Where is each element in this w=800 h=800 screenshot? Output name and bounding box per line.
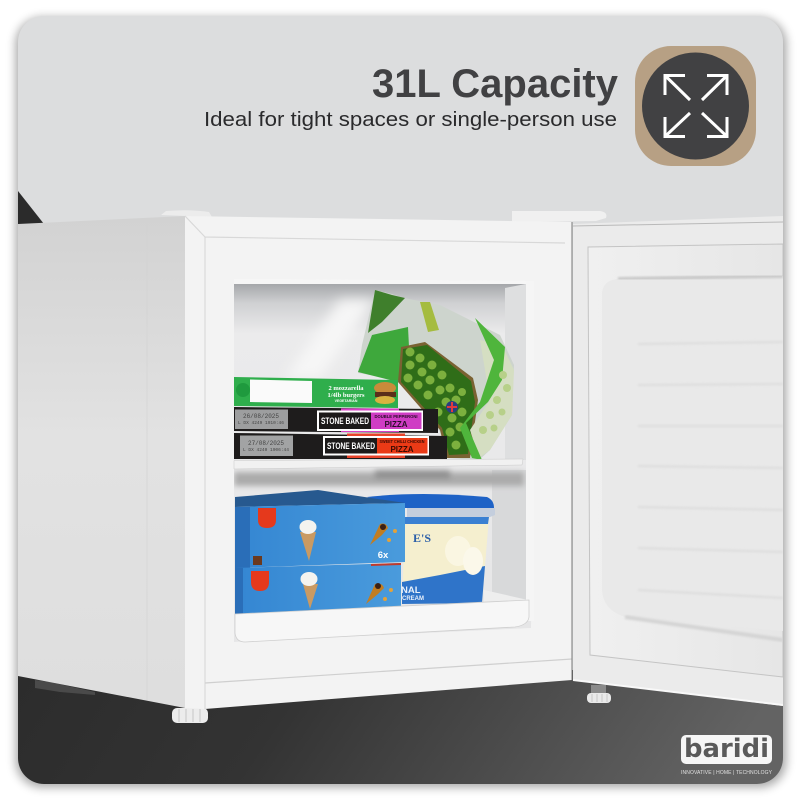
bag of frozen peas (358, 290, 514, 460)
top hinge left (162, 210, 212, 216)
dark wedge behind freezer (18, 191, 44, 224)
pizza box: pepperoni: STONE BAKED (321, 416, 369, 427)
heading: 31L Capacity (372, 62, 619, 106)
front frame (185, 216, 572, 709)
back wall (234, 283, 532, 643)
burger illustration (374, 382, 396, 404)
burger box text: 2 mozzarella (328, 385, 364, 392)
ice cream cone box, bottom (235, 563, 401, 614)
reflection below shelf (234, 472, 524, 486)
pizza box: sweet chilli chicken: 27/08/2025 (248, 440, 284, 447)
pizza box: pepperoni: L DX 4249 1910:46 (238, 420, 284, 426)
subheading: Ideal for tight spaces or single-person use (204, 108, 617, 131)
freezer side panel (18, 216, 185, 708)
logo: baridi (681, 734, 773, 776)
burger box: VEGETARIAN (335, 399, 358, 403)
ice cream tub: NAL (401, 585, 421, 596)
pizza box: sweet chilli chicken: PIZZA (390, 445, 414, 454)
logo tagline: INNOVATIVE | HOME | TECHNOLOGY (681, 770, 773, 776)
pack count: 6x (378, 550, 389, 561)
ice cream tub: CREAM (402, 596, 424, 602)
left foot bracket (35, 680, 95, 695)
pizza box: sweet chilli chicken: STONE BAKED (327, 441, 375, 452)
pizza box: sweet chilli chicken (234, 433, 447, 459)
burger box: 1/4lb burgers (327, 392, 365, 399)
flag roundel (446, 401, 458, 413)
logo: baridi: baridi (684, 734, 769, 764)
door (573, 216, 783, 706)
burger box (234, 377, 398, 408)
interior cavity (234, 279, 534, 643)
left adjustable foot (172, 708, 208, 723)
right wall (505, 284, 526, 460)
pizza box: pepperoni: 26/08/2025 (243, 413, 279, 420)
pizza box: pepperoni (234, 407, 438, 433)
wire shelf (234, 459, 523, 469)
bag green side strip (460, 318, 505, 460)
pizza box: pepperoni: PIZZA (384, 420, 408, 429)
door adjustable foot (587, 685, 611, 703)
pizza box: sweet chilli chicken: L DX 4240 1906:44 (243, 447, 289, 453)
top hinge right (512, 211, 606, 222)
pizza box: pepperoni: DOUBLE PEPPERONI (374, 414, 418, 419)
tub text: E'S (413, 531, 431, 545)
freezer unit (18, 210, 783, 723)
shelf lip bottom (235, 600, 529, 642)
icon: expand arrows (635, 46, 756, 166)
ice cream cone box, top (235, 490, 405, 568)
floor (18, 670, 783, 784)
door inner recess (602, 276, 783, 640)
bag translucent side (470, 340, 514, 458)
pizza box: sweet chilli chicken: SWEET CHILLI CHICKEN (380, 439, 424, 444)
pack highlight (420, 302, 439, 332)
lower right step (492, 592, 526, 602)
ice cream tub (367, 494, 495, 604)
